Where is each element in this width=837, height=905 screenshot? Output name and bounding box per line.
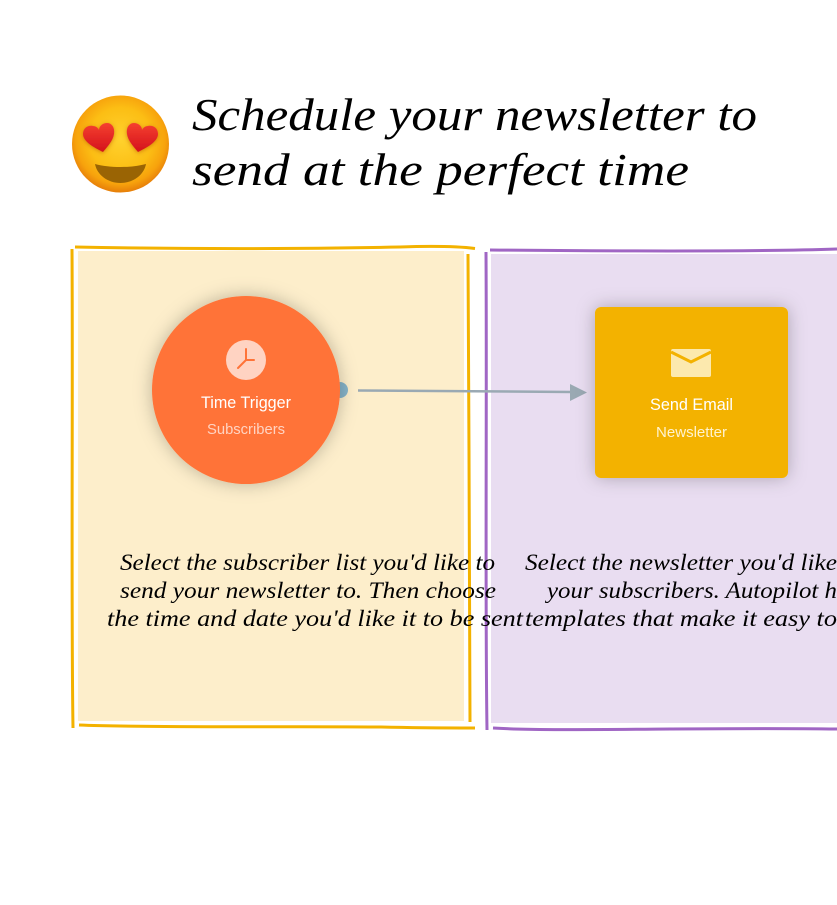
text block: send email description: Select the newsletter you'd like xyxy=(525,550,837,575)
panel: time trigger xyxy=(72,246,475,728)
icon: clock xyxy=(226,340,266,380)
node: time trigger: Time Trigger xyxy=(201,393,291,412)
icon: envelope xyxy=(671,349,711,377)
title: send at the perfect time xyxy=(192,144,689,195)
node: send email: Send Email xyxy=(650,395,733,414)
arrow xyxy=(358,384,587,401)
connector dot xyxy=(332,382,348,398)
text block: time trigger description xyxy=(107,550,524,631)
panel: send email xyxy=(486,249,837,730)
node: send email xyxy=(595,307,788,478)
text block: send email description: templates that make it easy to xyxy=(525,606,837,631)
text block: time trigger description: the time and date you'd like it to be sent xyxy=(107,606,524,631)
node: time trigger xyxy=(152,296,340,484)
icon: heart eyes emoji xyxy=(72,96,169,192)
text block: time trigger description: send your newsletter to. Then choose xyxy=(120,578,496,603)
node: time trigger: Subscribers xyxy=(207,421,285,438)
text block: send email description: your subscribers. Autopilot h xyxy=(545,578,837,603)
node: send email: Newsletter xyxy=(656,424,727,441)
text block: time trigger description: Select the subscriber list you'd like to xyxy=(120,550,495,575)
text block: send email description xyxy=(525,550,837,631)
title xyxy=(192,89,757,195)
title: Schedule your newsletter to xyxy=(192,89,757,140)
